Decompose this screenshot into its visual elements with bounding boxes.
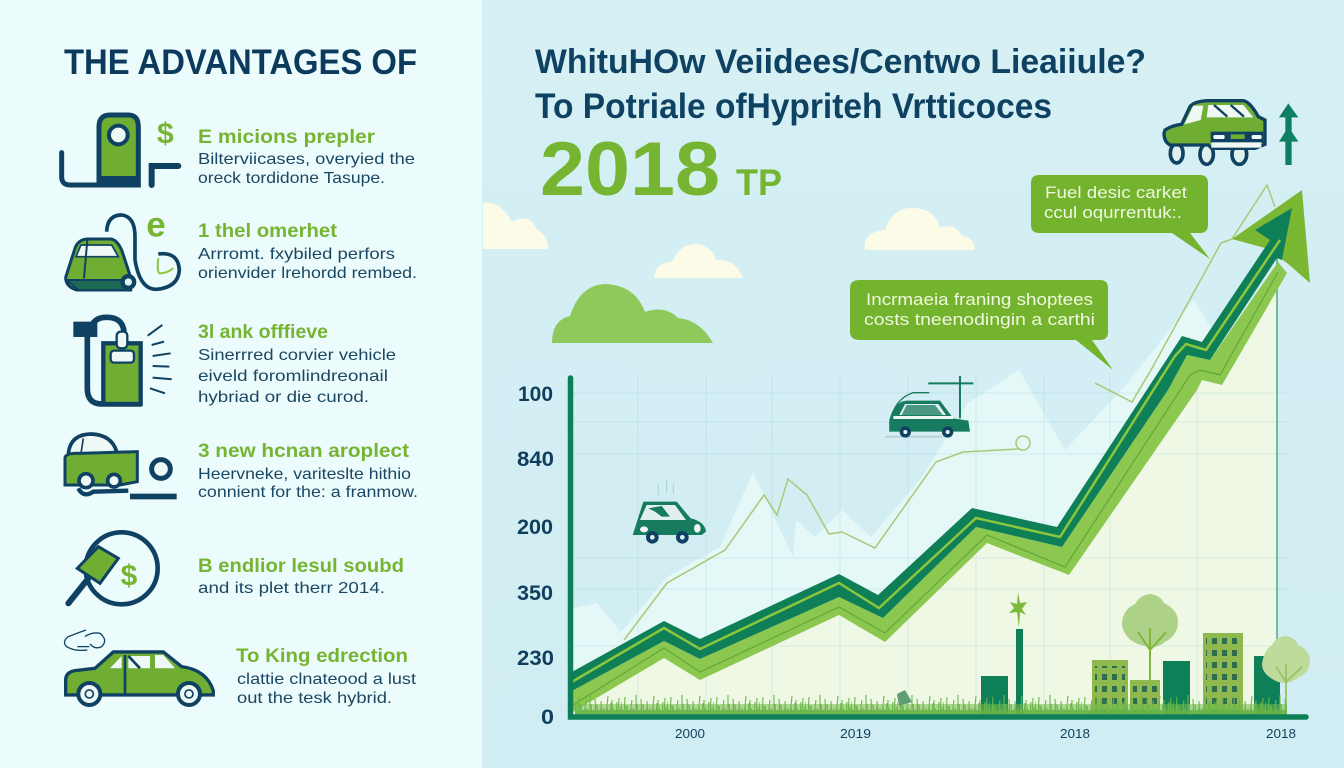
item 3: Sinerrred corvier vehicle xyxy=(198,347,396,364)
callout: fuel xyxy=(1031,175,1210,259)
year highlight xyxy=(540,127,782,212)
icon: small car xyxy=(633,480,706,544)
heading: advantages: THE ADVANTAGES OF xyxy=(64,43,417,82)
item 3: eiveld foromlindreonail xyxy=(198,368,388,385)
item 4: Heervneke, variteslte hithio xyxy=(198,466,411,483)
x axis labels xyxy=(675,726,1296,741)
x axis labels: 2018 xyxy=(1060,726,1090,741)
icon: green sedan xyxy=(65,630,213,705)
icon: magnifier with dollar xyxy=(68,532,158,604)
area: pale mountains xyxy=(573,300,1270,718)
line: dark band highlight xyxy=(570,240,1280,683)
item 1: E micions prepler xyxy=(198,127,376,148)
tree 1 xyxy=(1122,594,1178,680)
icon: magnifier with dollar: $ xyxy=(121,560,138,593)
item 6: To King edrection xyxy=(236,646,408,667)
item 4 xyxy=(65,434,418,501)
callout: costs: costs tneenodingin a carthi xyxy=(864,310,1095,329)
y axis labels: 840 xyxy=(517,448,554,471)
axes xyxy=(570,378,1306,717)
year highlight: 2018 xyxy=(540,127,720,212)
arrow head: light xyxy=(1232,190,1310,283)
item 3: 3l ank offfieve xyxy=(198,322,328,343)
icon: charging bag xyxy=(73,317,172,404)
callout: costs xyxy=(850,280,1113,370)
item 2 xyxy=(66,206,417,290)
callout: fuel: ccul oqurrentuk:. xyxy=(1044,203,1182,222)
item 5: and its plet therr 2014. xyxy=(198,580,385,597)
band: dark green xyxy=(570,208,1292,692)
y axis labels: 350 xyxy=(517,582,553,605)
callout: fuel: Fuel desic carket xyxy=(1045,183,1187,202)
item 2: orienvider lrehordd rembed. xyxy=(198,265,417,282)
clouds xyxy=(483,203,975,343)
panel: right background xyxy=(482,0,1344,768)
item 3: hybriad or die curod. xyxy=(198,389,369,406)
y axis labels: 200 xyxy=(517,516,553,539)
year highlight: TP xyxy=(736,162,782,203)
item 4: connient for the: a franmow. xyxy=(198,484,418,501)
tree 2 xyxy=(1262,636,1310,716)
item 3 xyxy=(73,317,396,406)
item 1 xyxy=(62,115,415,187)
item 5 xyxy=(68,532,404,604)
item 1: Bilterviicases, overyied the xyxy=(198,151,415,168)
item 2: Arrromt. fxybiled perfors xyxy=(198,246,395,263)
icon: fuel pump: $ xyxy=(157,117,174,150)
y axis labels: 230 xyxy=(517,647,554,670)
skyline: buildings and trees xyxy=(575,592,1310,716)
icon: plug-in car xyxy=(66,206,179,290)
x axis labels: 2019 xyxy=(840,726,871,741)
icon: fuel pump xyxy=(62,115,178,186)
icon: top right car and arrow xyxy=(1164,101,1298,165)
item 4: 3 new hcnan aroplect xyxy=(198,441,410,462)
item 1: oreck tordidone Tasupe. xyxy=(198,170,385,187)
x axis labels: 2000 xyxy=(675,726,705,741)
grass xyxy=(575,692,1287,716)
x axis labels: 2018 xyxy=(1266,726,1296,741)
item 2: 1 thel omerhet xyxy=(198,221,338,242)
line chart xyxy=(570,185,1310,718)
icon: plug-in car: e xyxy=(146,206,166,245)
icon: vehicle with wheel xyxy=(65,434,177,499)
main title: WhituHOw Veiidees/Centwo Lieaiiule? xyxy=(535,43,1146,81)
item 6: clattie clnateood a lust xyxy=(237,671,417,688)
line: thin trend xyxy=(624,185,1275,640)
line: light band detail xyxy=(573,272,1278,705)
icon: mid car xyxy=(885,376,973,438)
main title: To Potriale ofHypriteh Vrtticoces xyxy=(535,87,1052,126)
item 6 xyxy=(65,630,417,707)
area: pale green under curve xyxy=(573,290,1277,718)
callout: costs: Incrmaeia franing shoptees xyxy=(866,290,1093,309)
panel: left advantages xyxy=(0,0,482,768)
band: light green xyxy=(570,262,1287,714)
y axis labels: 0 xyxy=(541,706,554,729)
main title xyxy=(535,43,1146,126)
item 5: B endlior lesul soubd xyxy=(198,556,404,577)
y axis labels: 100 xyxy=(518,383,553,406)
item 6: out the tesk hybrid. xyxy=(237,690,392,707)
y axis labels xyxy=(517,383,554,729)
